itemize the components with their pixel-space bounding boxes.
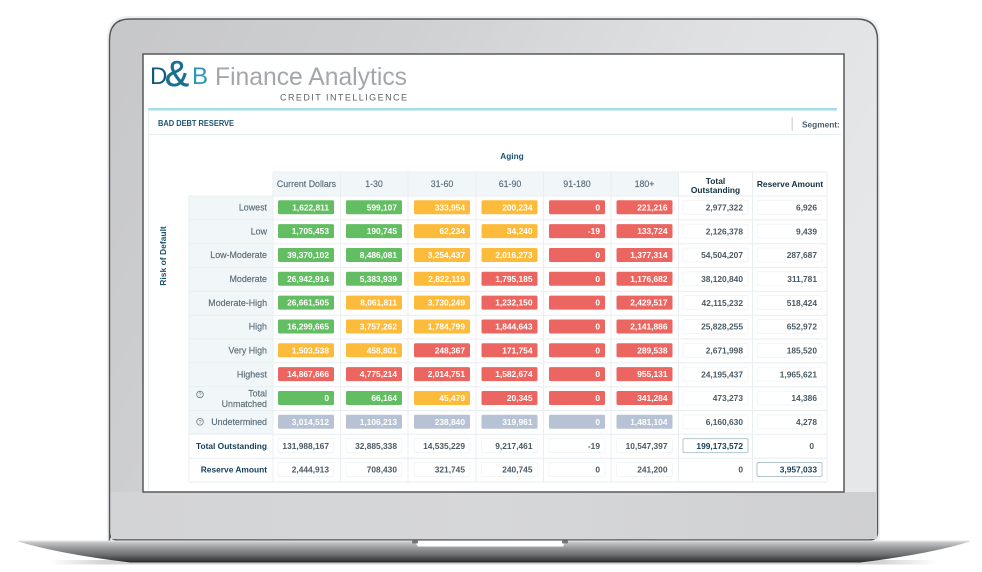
row: low-moderate: Low-Moderate [210, 250, 267, 260]
row: very high: 458,801 [367, 345, 397, 355]
row: very high: 2,671,998 [706, 346, 743, 356]
row: highest [237, 367, 822, 381]
row: reserve amount: 240,745 [502, 465, 533, 475]
row: high: High [249, 322, 267, 332]
row: lowest: 6,926 [796, 202, 817, 212]
axis title: risk of default: Risk of Default [158, 226, 168, 286]
row: total outstanding: 32,885,338 [355, 441, 397, 451]
row: lowest: 1,622,811 [292, 202, 329, 212]
row: total outstanding: -19 [588, 441, 600, 451]
row: undetermined: 1,481,104 [630, 417, 668, 427]
row: moderate: 38,120,840 [701, 274, 743, 284]
row: lowest: 200,234 [502, 202, 533, 212]
row: total unmatched: ? [198, 393, 202, 399]
row: reserve amount: 708,430 [367, 465, 397, 475]
row: moderate: 2,822,119 [428, 274, 465, 284]
table background and grid [189, 172, 827, 482]
row: low: 62,234 [439, 226, 465, 236]
row: moderate [230, 272, 822, 286]
row: total outstanding: 131,988,167 [282, 441, 329, 451]
row: low-moderate: 2,016,273 [495, 250, 533, 260]
row: total outstanding: 0 [809, 441, 814, 451]
row: undetermined: 0 [595, 417, 600, 427]
row: low-moderate: 8,486,081 [360, 250, 397, 260]
panel: report frame [148, 110, 841, 490]
row: high [249, 320, 822, 334]
row: moderate: 0 [595, 274, 600, 284]
row: moderate: 5,383,939 [360, 274, 397, 284]
row: very high: 1,503,538 [292, 345, 329, 355]
table column headers: 180+ [635, 179, 654, 189]
row: high: 1,844,643 [495, 322, 533, 332]
row: low-moderate: 39,370,102 [287, 250, 329, 260]
row: low-moderate: 54,504,207 [701, 250, 743, 260]
logo: D&B Finance Analytics: D [150, 63, 167, 90]
row: reserve amount [201, 462, 822, 476]
row: reserve amount: 0 [595, 465, 600, 475]
row: lowest: Lowest [239, 202, 268, 212]
segment label: Segment: [802, 120, 840, 130]
row: very high: 171,754 [502, 345, 533, 355]
row: total outstanding: 9,217,461 [495, 441, 533, 451]
row: low: 1,705,453 [292, 226, 329, 236]
row: high: 652,972 [787, 322, 817, 332]
row: very high: 0 [595, 345, 600, 355]
row: lowest: 0 [595, 202, 600, 212]
row: high: 3,757,262 [360, 322, 397, 332]
row: total unmatched: 20,345 [507, 393, 533, 403]
row: moderate: Moderate [230, 274, 267, 284]
row: moderate-high: 2,429,517 [630, 298, 668, 308]
laptop lid [107, 16, 880, 541]
row: very high: 248,367 [435, 345, 465, 355]
row: total unmatched: 341,284 [637, 393, 668, 403]
row: moderate: 1,176,682 [630, 274, 668, 284]
table column headers: Current Dollars [277, 179, 337, 189]
row: total outstanding: Total Outstanding [196, 441, 267, 451]
row: total unmatched: 0 [324, 393, 329, 403]
row: total outstanding: 199,173,572 [696, 441, 743, 451]
row: low: -19 [588, 226, 600, 236]
row: total unmatched: Unmatched [222, 399, 267, 409]
row: lowest [239, 200, 822, 214]
table column headers [277, 176, 823, 195]
row: moderate-high: Moderate-High [208, 298, 267, 308]
blue header rule [148, 108, 837, 110]
row: undetermined: 319,961 [502, 417, 533, 427]
row: undetermined: 4,278 [796, 417, 817, 427]
row: low-moderate: 0 [595, 250, 600, 260]
row: total outstanding: 14,535,229 [423, 441, 465, 451]
row: total unmatched: 14,386 [791, 393, 817, 403]
row: total unmatched: 45,479 [439, 393, 465, 403]
row: reserve amount: 3,957,033 [780, 465, 817, 475]
logo: D&B Finance Analytics [150, 53, 407, 102]
row: very high: Very High [229, 346, 267, 356]
row: highest: 24,195,437 [701, 369, 743, 379]
row: moderate-high: 0 [595, 298, 600, 308]
row: lowest: 2,977,322 [706, 202, 743, 212]
row: moderate-high: 26,661,505 [287, 298, 329, 308]
row: total outstanding: 10,547,397 [626, 441, 668, 451]
row: total unmatched [197, 389, 822, 409]
row: undetermined: 238,840 [435, 417, 465, 427]
axis title: aging: Aging [500, 151, 524, 161]
row: low-moderate: 1,377,314 [630, 250, 668, 260]
row: reserve amount: Reserve Amount [201, 465, 267, 475]
row: lowest: 221,216 [637, 202, 668, 212]
row: low-moderate [210, 248, 822, 262]
heading: bad debt reserve: BAD DEBT RESERVE [158, 119, 235, 128]
row: moderate: 311,781 [787, 274, 817, 284]
row: high: 16,299,665 [287, 322, 329, 332]
row: lowest: 599,107 [367, 202, 397, 212]
row: undetermined: 3,014,512 [292, 417, 329, 427]
table column headers: Outstanding [691, 185, 740, 195]
row: low-moderate: 287,687 [787, 250, 817, 260]
row: low: 9,439 [796, 226, 817, 236]
row: lowest: 333,954 [435, 202, 465, 212]
segment label [792, 117, 840, 131]
row: low: 133,724 [637, 226, 668, 236]
row: moderate-high: 3,730,249 [428, 298, 465, 308]
row: low: 190,745 [367, 226, 397, 236]
row: reserve amount: 241,200 [637, 465, 668, 475]
row: moderate: 1,795,185 [495, 274, 533, 284]
row: highest: 1,582,674 [495, 369, 533, 379]
row: moderate: 26,942,914 [287, 274, 329, 284]
row: low: Low [251, 226, 268, 236]
row: total unmatched: Total [248, 389, 267, 399]
logo: D&B Finance Analytics: CREDIT INTELLIGENCE [280, 92, 407, 102]
row: highest: 14,867,666 [287, 369, 329, 379]
row: low: 2,126,378 [706, 226, 743, 236]
table column headers: 31-60 [431, 179, 453, 189]
table column headers: 61-90 [499, 179, 521, 189]
row: total unmatched: 66,164 [371, 393, 397, 403]
row: undetermined: Undetermined [211, 417, 267, 427]
row: highest: 0 [595, 369, 600, 379]
row: undetermined [197, 415, 822, 429]
screen [143, 53, 844, 492]
row: highest: 955,131 [637, 369, 668, 379]
row: high: 25,828,255 [701, 322, 743, 332]
row: highest: Highest [237, 369, 268, 379]
table column headers: Reserve Amount [757, 179, 823, 189]
row: highest: 2,014,751 [428, 369, 465, 379]
logo: D&B Finance Analytics: Finance Analytics [215, 63, 407, 91]
row: high: 1,784,799 [428, 322, 465, 332]
row: low: 34,240 [507, 226, 533, 236]
table column headers: 1-30 [365, 179, 383, 189]
row: moderate-high: 42,115,232 [702, 298, 743, 308]
table column headers: Total [706, 176, 725, 186]
logo: D&B Finance Analytics: & [165, 53, 189, 94]
row: very high: 185,520 [787, 346, 817, 356]
table column headers: 91-180 [563, 179, 591, 189]
row: moderate-high [208, 296, 822, 310]
row: total unmatched: 473,273 [713, 393, 743, 403]
row: very high [229, 343, 822, 357]
row: high: 0 [595, 322, 600, 332]
row: total outstanding [196, 439, 814, 453]
row: moderate-high: 8,061,811 [360, 298, 397, 308]
logo: D&B Finance Analytics: B [192, 63, 208, 90]
row: highest: 4,775,214 [360, 369, 397, 379]
row: total unmatched: 0 [595, 393, 600, 403]
row: reserve amount: 321,745 [435, 465, 465, 475]
row: undetermined: ? [198, 420, 202, 426]
row: moderate-high: 1,232,150 [495, 298, 533, 308]
row: moderate-high: 518,424 [787, 298, 817, 308]
row: undetermined: 1,106,213 [360, 417, 397, 427]
row: undetermined: 6,160,630 [706, 417, 743, 427]
row: reserve amount: 2,444,913 [292, 465, 329, 475]
row: very high: 289,538 [637, 345, 668, 355]
row: high: 2,141,886 [630, 322, 668, 332]
row: reserve amount: 0 [738, 465, 743, 475]
row: low [251, 224, 822, 238]
row: low-moderate: 3,254,437 [428, 250, 465, 260]
row: highest: 1,965,621 [780, 369, 817, 379]
laptop base [18, 540, 970, 564]
